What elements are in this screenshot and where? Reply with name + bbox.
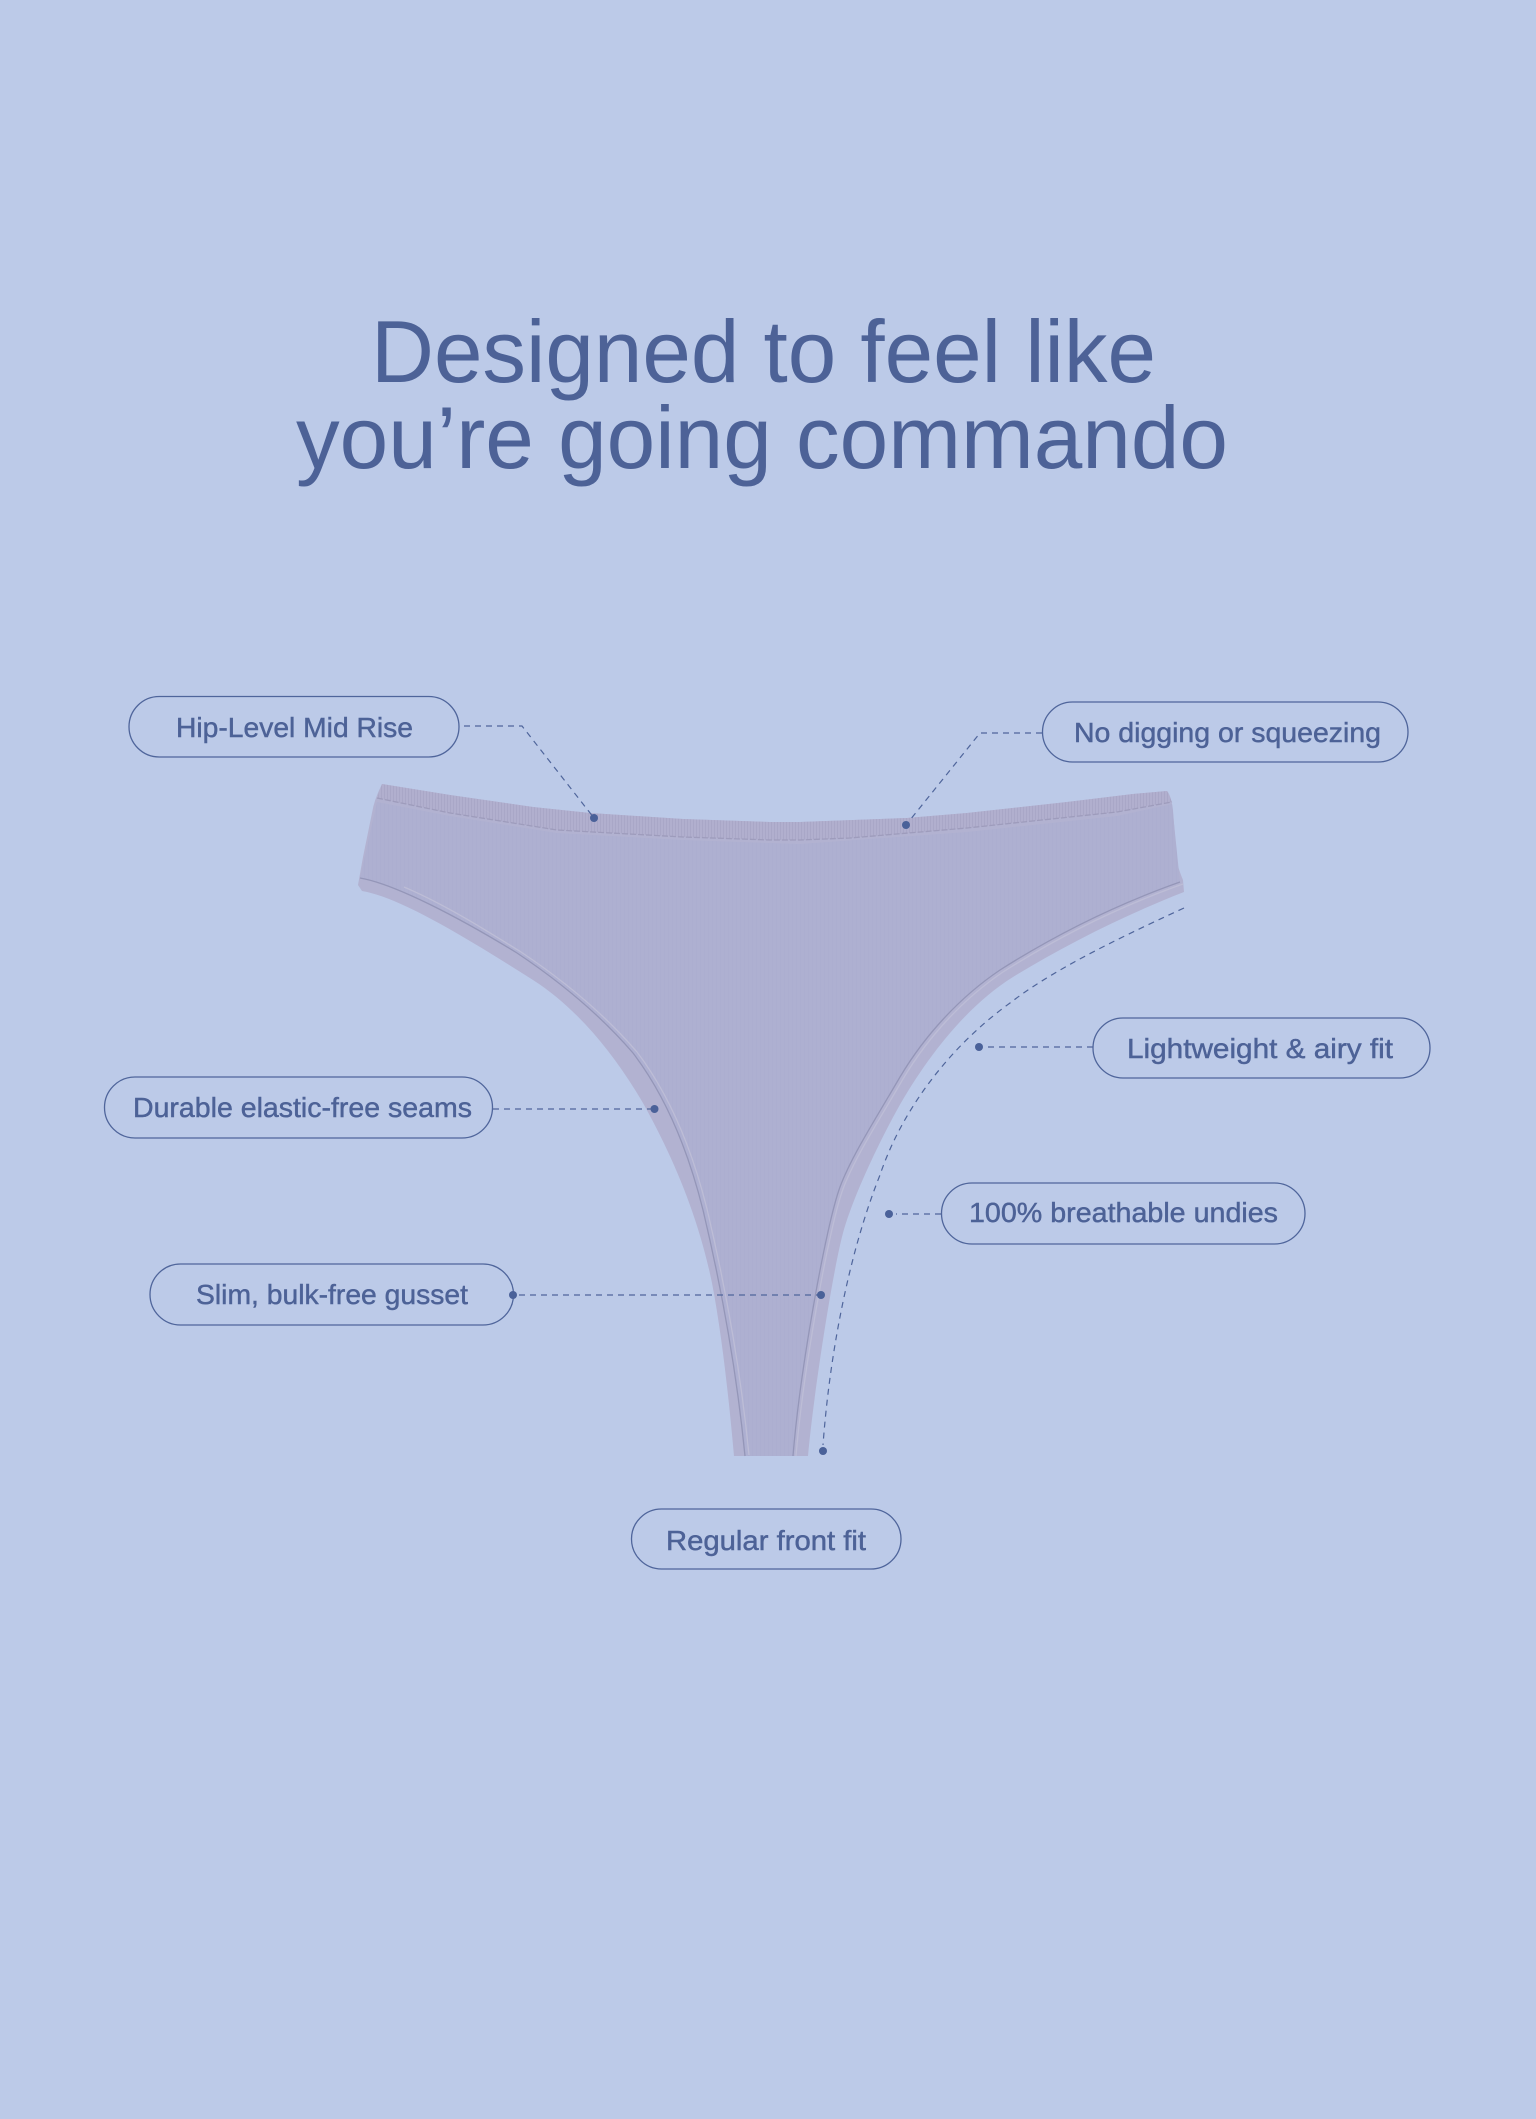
leader line bbox=[464, 726, 594, 818]
title: Designed to feel like bbox=[371, 302, 1156, 401]
callout: Slim, bulk-free gusset bbox=[150, 1264, 825, 1325]
left leg seam bbox=[360, 878, 749, 1456]
leader line bbox=[493, 1108, 654, 1110]
garment body panel bbox=[360, 802, 1180, 1456]
callout: No digging or squeezing bbox=[902, 702, 1408, 829]
right leg seam bbox=[793, 882, 1183, 1456]
dot bbox=[650, 1105, 658, 1113]
label: Durable elastic-free seams bbox=[133, 1092, 472, 1123]
pill bbox=[129, 696, 459, 757]
label: Slim, bulk-free gusset bbox=[196, 1279, 468, 1310]
waistband bbox=[377, 784, 1172, 840]
label: Lightweight & airy fit bbox=[1127, 1033, 1393, 1064]
leader line bbox=[906, 733, 1042, 825]
title: you’re going commando bbox=[296, 388, 1228, 487]
dot bbox=[819, 1447, 827, 1455]
waistband stitch line bbox=[377, 798, 1172, 840]
pill bbox=[942, 1183, 1305, 1244]
left dot bbox=[509, 1291, 517, 1299]
pill bbox=[104, 1077, 492, 1138]
leader line bbox=[519, 1294, 821, 1296]
callout: Lightweight & airy fit bbox=[975, 1018, 1430, 1078]
label: Regular front fit bbox=[666, 1525, 866, 1556]
callout: Hip-Level Mid Rise bbox=[129, 696, 598, 822]
garment outline with leg binding bbox=[358, 784, 1184, 1456]
leader line bbox=[986, 1046, 1093, 1048]
pill bbox=[1042, 702, 1408, 762]
garment: thong product image bbox=[358, 784, 1184, 1456]
callout: Durable elastic-free seams bbox=[104, 1077, 658, 1138]
title bbox=[296, 302, 1228, 487]
label: No digging or squeezing bbox=[1074, 717, 1381, 748]
label: 100% breathable undies bbox=[969, 1197, 1278, 1228]
label: Hip-Level Mid Rise bbox=[176, 712, 413, 743]
leader line bbox=[896, 1213, 941, 1215]
dot bbox=[885, 1210, 893, 1218]
pill bbox=[150, 1264, 514, 1325]
dot bbox=[902, 821, 910, 829]
dot bbox=[975, 1043, 983, 1051]
curved leader line bbox=[823, 908, 1184, 1445]
right dot bbox=[817, 1291, 825, 1299]
callout: 100% breathable undies bbox=[885, 1183, 1305, 1244]
dot bbox=[590, 814, 598, 822]
pill bbox=[632, 1509, 901, 1569]
callout: Regular front fit bbox=[632, 908, 1184, 1569]
pill bbox=[1093, 1018, 1430, 1078]
